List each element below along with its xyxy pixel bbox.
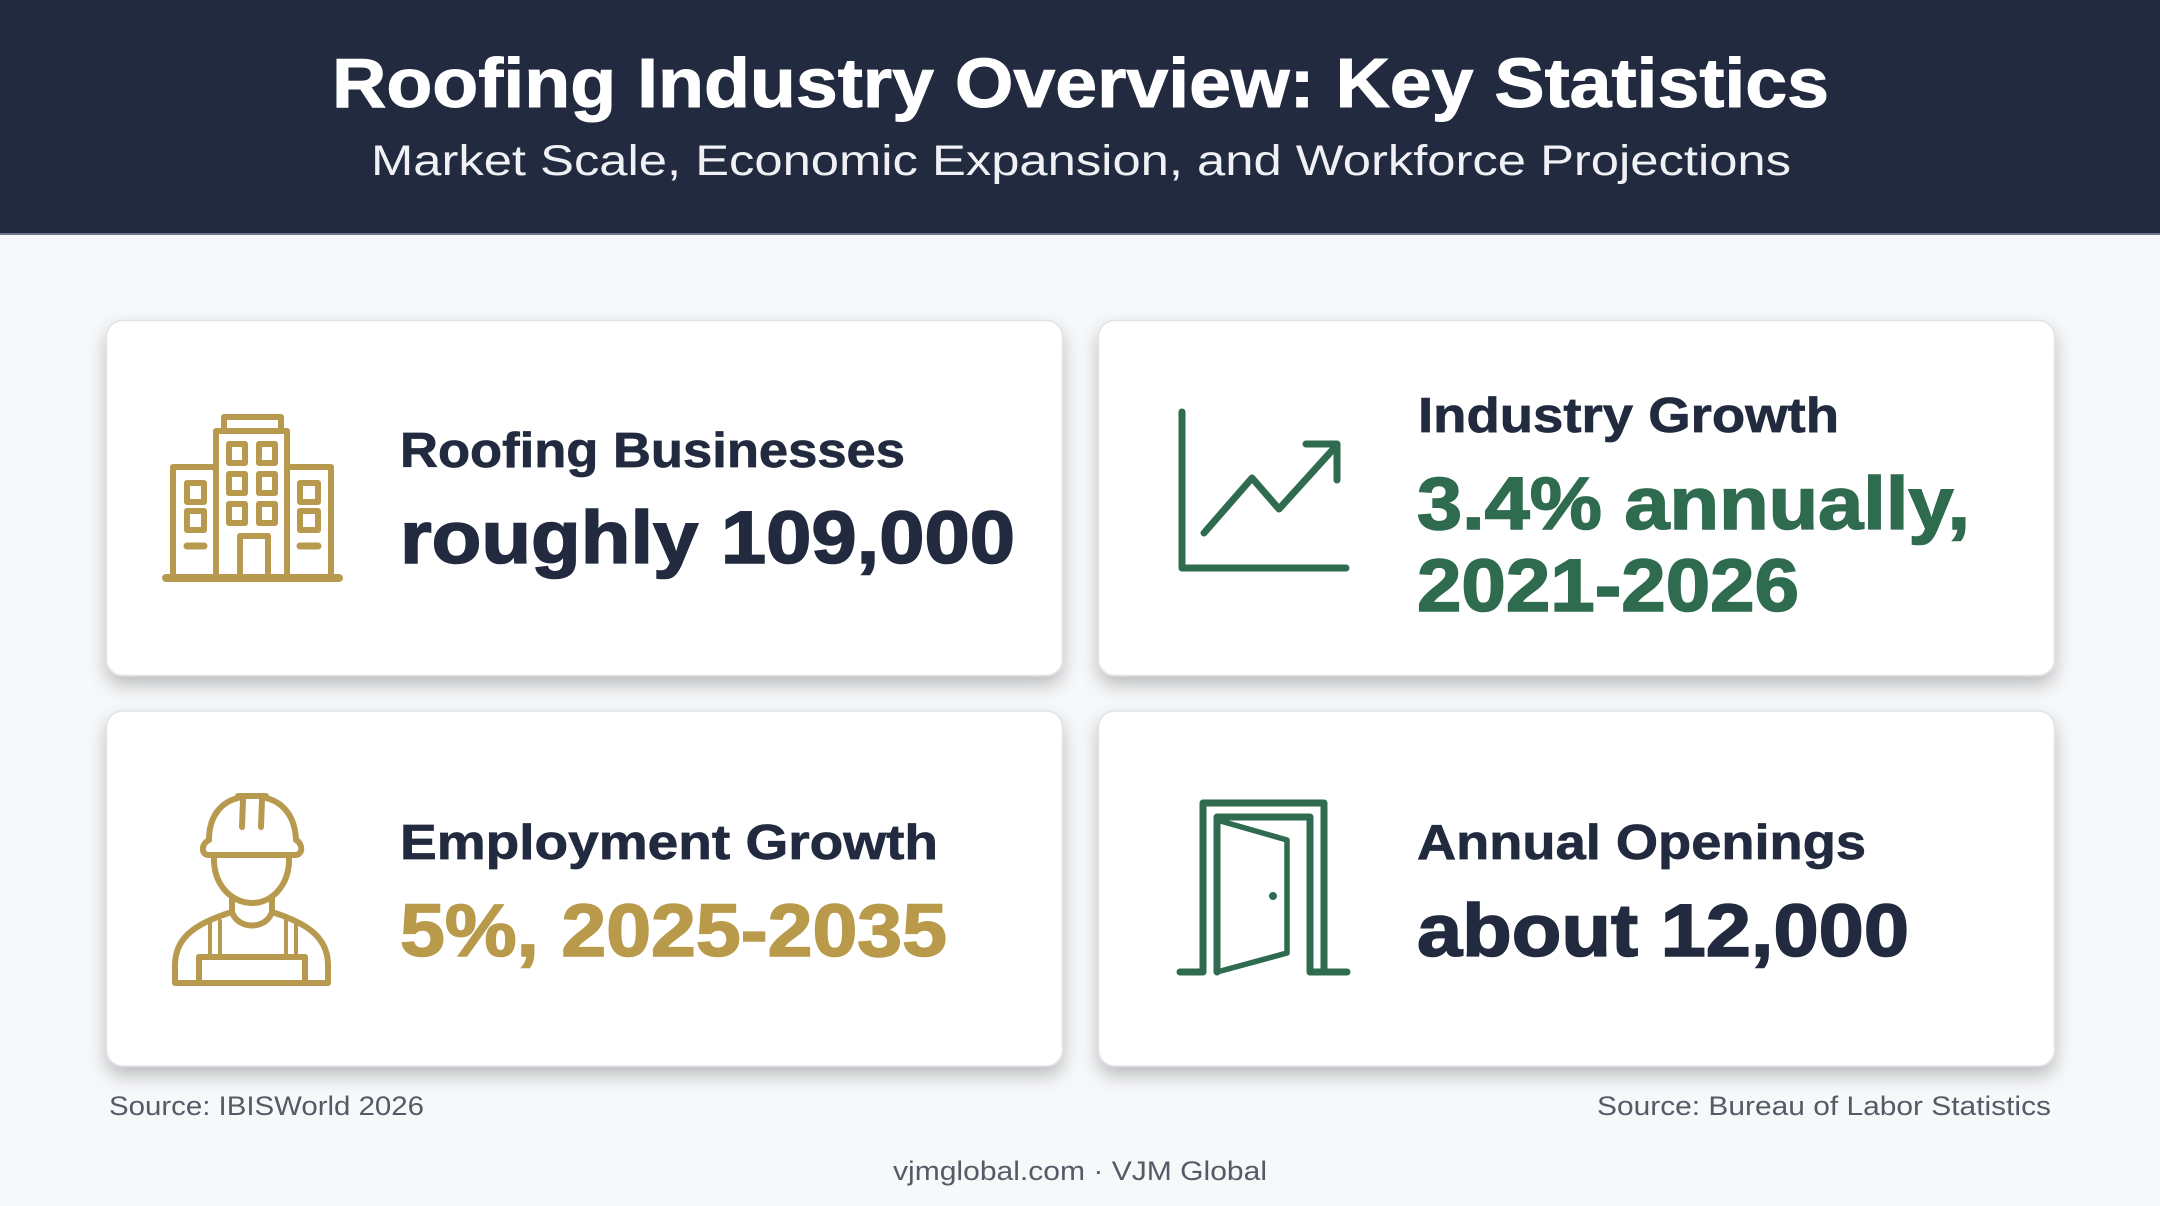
icon: rising line chart (1182, 412, 1346, 568)
value: 2021-2026 (1417, 544, 1799, 627)
panel: annual openings (1098, 711, 2054, 1066)
footer credit: vjmglobal.com · VJM Global (893, 1156, 1267, 1186)
label: Roofing Businesses (400, 424, 905, 478)
value: 5%, 2025-2035 (400, 889, 947, 972)
subtitle: Market Scale, Economic Expansion, and Workforce Projections (371, 137, 1791, 185)
header band (0, 0, 2160, 235)
label: Employment Growth (400, 816, 938, 870)
value (1417, 462, 1970, 627)
icon: construction worker (175, 796, 328, 983)
value: roughly 109,000 (400, 496, 1015, 579)
value: about 12,000 (1417, 889, 1909, 972)
source: IBISWorld: Source: IBISWorld 2026 (109, 1091, 424, 1121)
source: Bureau of Labor Statistics: Source: Bureau of Labor Statistics (1597, 1091, 2051, 1121)
title: Roofing Industry Overview: Key Statistics (332, 44, 1829, 122)
door knob (1269, 892, 1277, 900)
panel: industry growth (1098, 320, 2054, 676)
icon: office building (166, 417, 339, 578)
panel: roofing businesses (106, 320, 1062, 676)
label: Industry Growth (1418, 389, 1839, 443)
value: 3.4% annually, (1417, 462, 1970, 545)
panel: employment growth (106, 711, 1062, 1066)
label: Annual Openings (1417, 816, 1866, 870)
icon: open door (1180, 803, 1347, 972)
